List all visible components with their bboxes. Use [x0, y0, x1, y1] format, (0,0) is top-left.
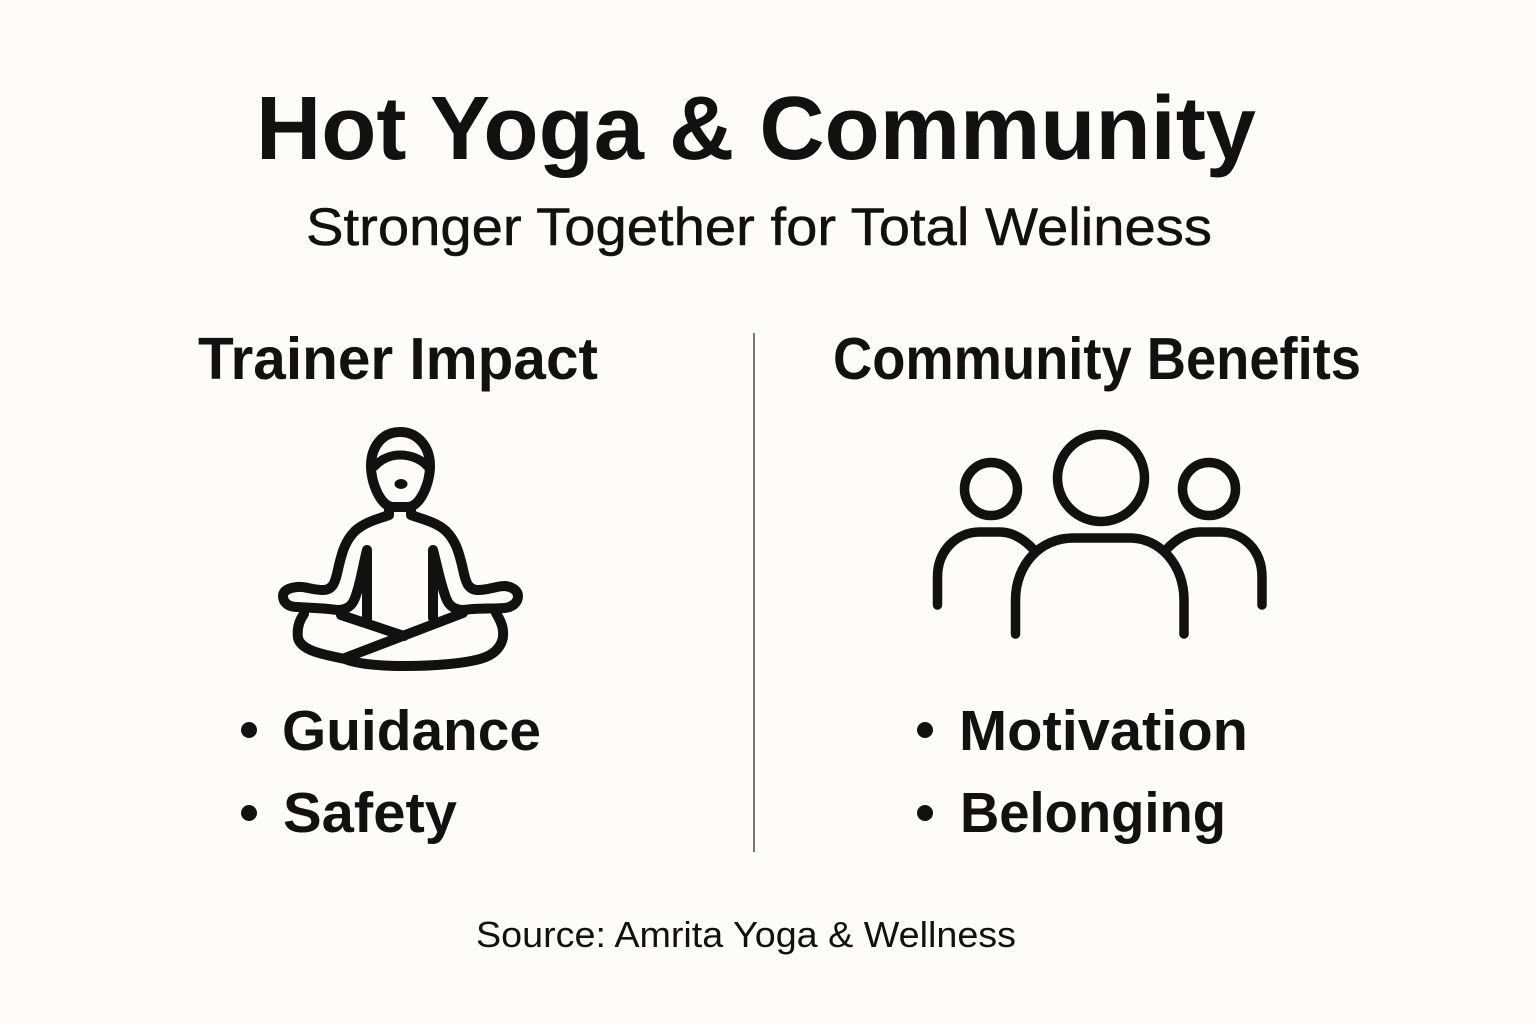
bullet list: community benefits: Belonging: [960, 781, 1226, 845]
panel: community benefits: [833, 326, 1361, 845]
bullet list: community benefits: Motivation: [959, 699, 1248, 763]
bullet list: trainer impact: Safety: [283, 781, 457, 845]
title: Hot Yoga & Community: [256, 79, 1256, 179]
bullet list: trainer impact: [241, 699, 541, 845]
subtitle: Stronger Together for Total Weliness: [306, 198, 1212, 257]
panel: trainer impact: [198, 326, 598, 845]
source note: Source: Amrita Yoga & Wellness: [476, 914, 1016, 955]
icon: group of people: [938, 434, 1262, 634]
divider: [753, 333, 755, 852]
bullet list: trainer impact: Guidance: [282, 699, 541, 763]
heading: community benefits: Community Benefits: [833, 326, 1361, 392]
icon: meditating figure: [283, 432, 518, 666]
heading: trainer impact: Trainer Impact: [198, 326, 598, 392]
bullet list: community benefits: [917, 699, 1248, 845]
